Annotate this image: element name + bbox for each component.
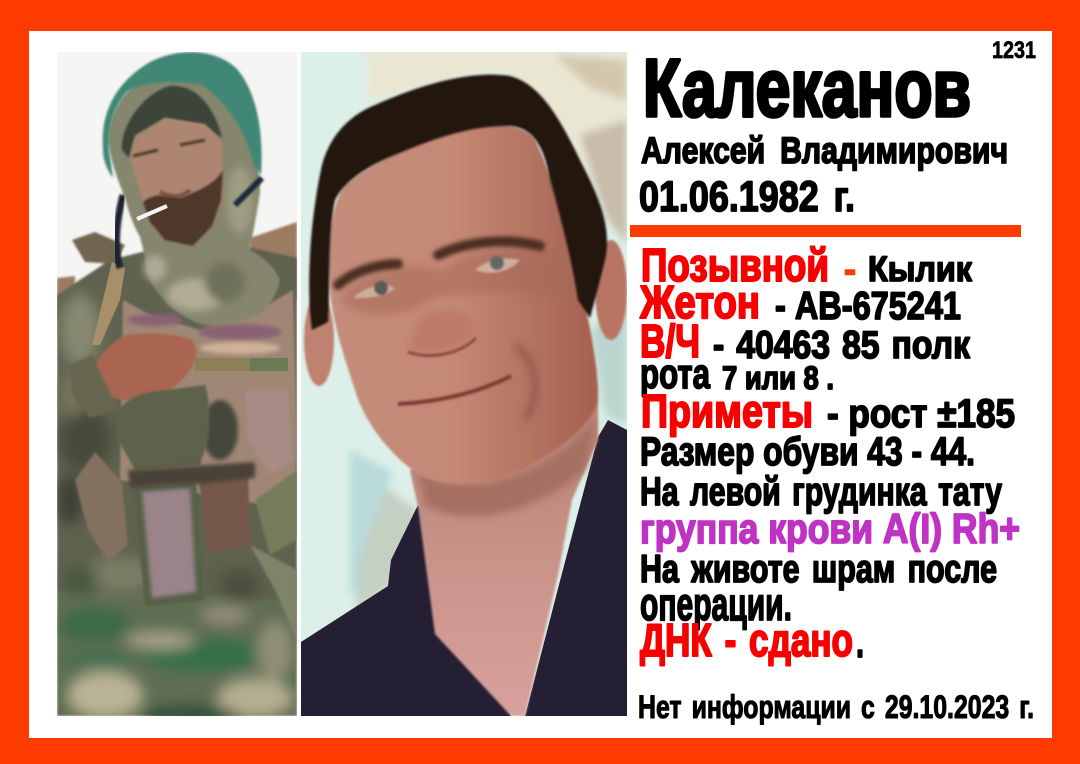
photo: portrait in dark shirt <box>301 52 627 716</box>
cigarette <box>137 206 167 219</box>
neck <box>410 400 598 716</box>
military unit: - 40463 85 полк <box>713 324 970 367</box>
given name: Алексей Владимирович <box>641 130 1008 171</box>
dark waist band <box>128 462 255 488</box>
eyes <box>133 140 205 156</box>
DNA status: . <box>856 615 864 667</box>
scar continued: операции. <box>640 578 792 630</box>
chin strap <box>117 195 123 268</box>
wall and ornament <box>350 52 627 612</box>
military unit: В/Ч <box>640 315 700 367</box>
nose <box>410 309 472 352</box>
shoulder strap <box>92 262 125 345</box>
chest pouch <box>117 385 209 470</box>
DNA status: ДНК - сдано <box>640 614 853 666</box>
knitted cap <box>122 86 222 158</box>
armour plate <box>120 290 297 510</box>
photo: soldier in camouflage <box>57 52 297 726</box>
velcro patch <box>195 358 255 371</box>
hand <box>93 334 196 400</box>
company: рота <box>640 350 710 397</box>
nose and lips <box>160 190 190 196</box>
right pouch <box>198 477 250 552</box>
eyes <box>353 256 520 298</box>
helmet buckle <box>235 178 262 205</box>
cheek fold <box>515 345 535 420</box>
distinguishing marks: height: - рост ±185 <box>827 392 1015 436</box>
ears <box>304 294 334 386</box>
camouflage patches <box>58 294 293 726</box>
call sign: Позывной <box>641 239 829 291</box>
beard <box>143 170 223 246</box>
dog tag <box>639 276 961 328</box>
eyebrows <box>338 241 540 285</box>
jacket cuff <box>71 356 114 418</box>
central pouch <box>134 482 204 606</box>
blood group: группа крови A(I) Rh+ <box>640 505 1020 552</box>
shirt <box>301 420 627 716</box>
helmet <box>103 52 262 178</box>
shoe size: Размер обуви 43 - 44. <box>640 430 975 474</box>
green strap on plate <box>250 358 288 371</box>
dog tag: - АВ-675241 <box>775 285 961 328</box>
jacket and trousers <box>57 232 297 716</box>
company: 7 или 8 . <box>722 360 834 396</box>
hair <box>309 75 607 330</box>
ground behind soldier <box>57 222 297 320</box>
call sign: - <box>844 249 856 291</box>
eye socket shading <box>342 253 520 316</box>
military unit <box>640 315 970 367</box>
hood and collar <box>108 74 280 326</box>
call sign: Кылик <box>868 250 972 289</box>
company <box>640 350 834 397</box>
left pouch <box>75 452 128 562</box>
surname heading: Калеканов <box>643 43 971 134</box>
face <box>130 118 223 246</box>
distinguishing marks: height: Приметы <box>641 385 813 437</box>
birth date: 01.06.1982 г. <box>639 173 855 221</box>
divider bar <box>630 225 1021 237</box>
face <box>329 124 598 484</box>
dog tag: Жетон <box>639 276 760 328</box>
distinguishing marks: height <box>641 385 1015 437</box>
neck shadow under chin <box>418 420 596 516</box>
mouth <box>398 376 511 404</box>
flap and straps right <box>245 390 292 475</box>
case number: 1231 <box>992 37 1036 64</box>
